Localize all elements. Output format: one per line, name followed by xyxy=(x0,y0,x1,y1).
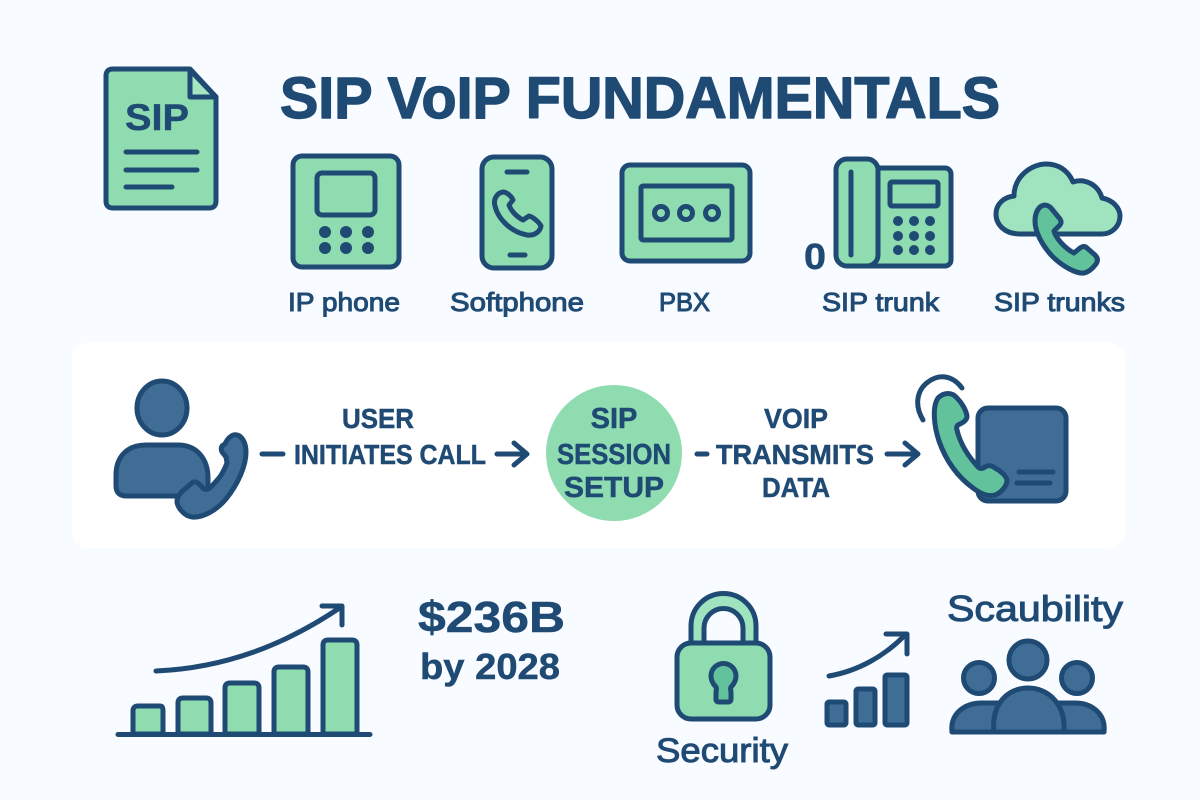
step: VoIP transmits data: DATA xyxy=(762,472,830,503)
label: SIP trunks: SIP trunks xyxy=(994,287,1125,317)
label: IP phone: IP phone xyxy=(288,287,400,317)
step: user initiates call: USER xyxy=(342,403,414,434)
label: SIP trunk: SIP trunk xyxy=(822,287,940,317)
arrow: to SIP session xyxy=(497,443,527,465)
icon: SIP document xyxy=(106,69,216,208)
step: VoIP transmits data: VOIP xyxy=(764,403,828,434)
icon: receiving phone xyxy=(918,377,1066,501)
bar chart: market growth xyxy=(118,606,370,734)
step: SIP session setup: SETUP xyxy=(564,472,664,504)
step: SIP session setup: SIP xyxy=(591,403,637,435)
icon: IP phone xyxy=(293,156,399,267)
icon: people group xyxy=(952,641,1104,732)
icon: SIP document: SIP xyxy=(125,97,189,138)
stray numeral 0: 0 xyxy=(804,236,826,277)
icon: user with phone xyxy=(116,381,246,517)
icon: desk phone xyxy=(836,159,951,266)
arrow: to receiver xyxy=(887,443,918,465)
icon: small growth chart xyxy=(827,634,907,725)
step: user initiates call xyxy=(262,403,486,470)
step: user initiates call: INITIATES CALL xyxy=(294,439,486,470)
icon: softphone xyxy=(482,157,552,268)
label: Softphone: Softphone xyxy=(450,287,584,317)
icon: padlock xyxy=(677,594,770,719)
step: SIP session setup xyxy=(546,385,682,521)
step: VoIP transmits data: TRANSMITS xyxy=(716,439,874,470)
stat: market size xyxy=(418,593,565,687)
panel: call flow xyxy=(72,343,1125,548)
stat: market size: $236B xyxy=(418,593,565,642)
label: PBX: PBX xyxy=(659,287,710,317)
stat: market size: by 2028 xyxy=(420,646,560,687)
step: VoIP transmits data xyxy=(697,403,874,503)
icon: cloud phone xyxy=(996,164,1120,273)
title: SIP VoIP FUNDAMENTALS xyxy=(280,66,1000,131)
label: Scaubility: Scaubility xyxy=(947,588,1123,629)
icon: PBX xyxy=(622,165,750,261)
label: Security: Security xyxy=(656,732,788,770)
step: SIP session setup: SESSION xyxy=(557,439,671,471)
